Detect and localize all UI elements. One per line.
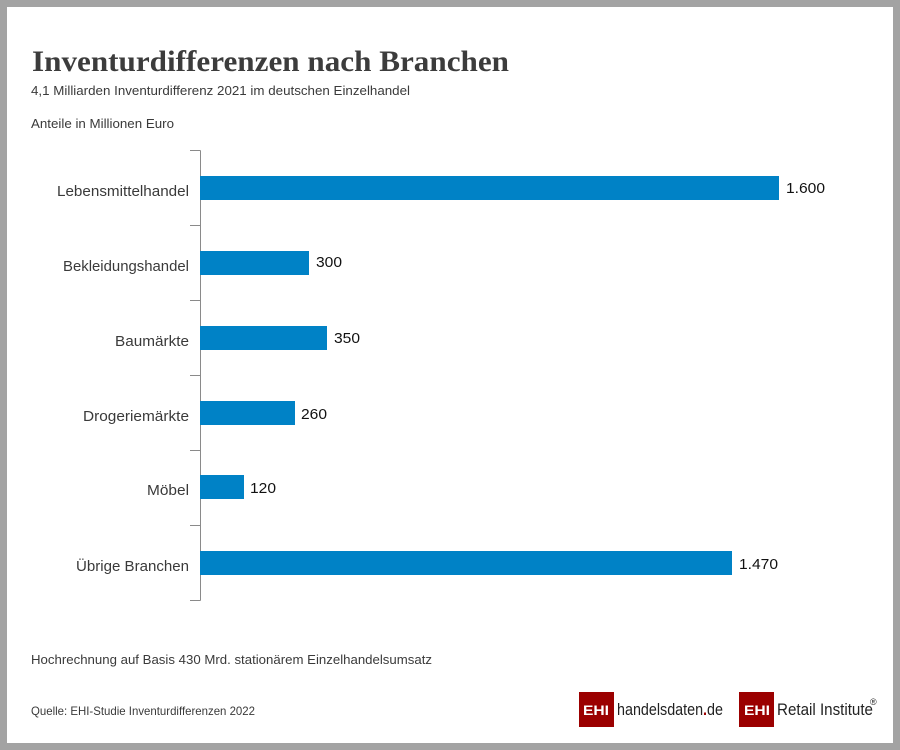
value labels: 120 bbox=[250, 481, 276, 497]
logo: EHI Retail Institute: EHI bbox=[744, 702, 770, 718]
value labels bbox=[250, 181, 825, 573]
category labels: Drogeriemärkte bbox=[83, 409, 189, 425]
value labels: 260 bbox=[301, 407, 327, 423]
value labels: 350 bbox=[334, 331, 360, 347]
axis bbox=[190, 150, 200, 600]
unit note: Anteile in Millionen Euro bbox=[31, 116, 174, 131]
logo: EHI Retail Institute: Retail Institute bbox=[777, 700, 873, 719]
bars bbox=[200, 176, 779, 575]
footnote: Hochrechnung auf Basis 430 Mrd. stationärem Einzelhandelsumsatz bbox=[31, 652, 432, 667]
source: Quelle: EHI-Studie Inventurdifferenzen 2022 bbox=[31, 704, 255, 718]
subtitle: 4,1 Milliarden Inventurdifferenz 2021 im deutschen Einzelhandel bbox=[31, 83, 410, 98]
category labels: Lebensmittelhandel bbox=[57, 184, 189, 200]
title: Inventurdifferenzen nach Branchen bbox=[32, 45, 509, 78]
logo: EHI handelsdaten.de: EHI bbox=[583, 702, 609, 718]
category labels: Baumärkte bbox=[115, 334, 189, 350]
logo: EHI Retail Institute bbox=[739, 692, 877, 727]
logo: EHI Retail Institute: ® bbox=[870, 697, 877, 707]
logo: EHI handelsdaten.de: handelsdaten.de bbox=[617, 700, 723, 719]
category labels: Bekleidungshandel bbox=[63, 259, 189, 275]
logo: EHI handelsdaten.de bbox=[579, 692, 723, 727]
category labels: Übrige Branchen bbox=[76, 557, 189, 575]
value labels: 1.470 bbox=[739, 557, 778, 573]
value labels: 1.600 bbox=[786, 181, 825, 197]
category labels: Möbel bbox=[147, 483, 189, 499]
bar chart bbox=[57, 150, 825, 600]
value labels: 300 bbox=[316, 255, 342, 271]
category labels bbox=[57, 184, 189, 575]
